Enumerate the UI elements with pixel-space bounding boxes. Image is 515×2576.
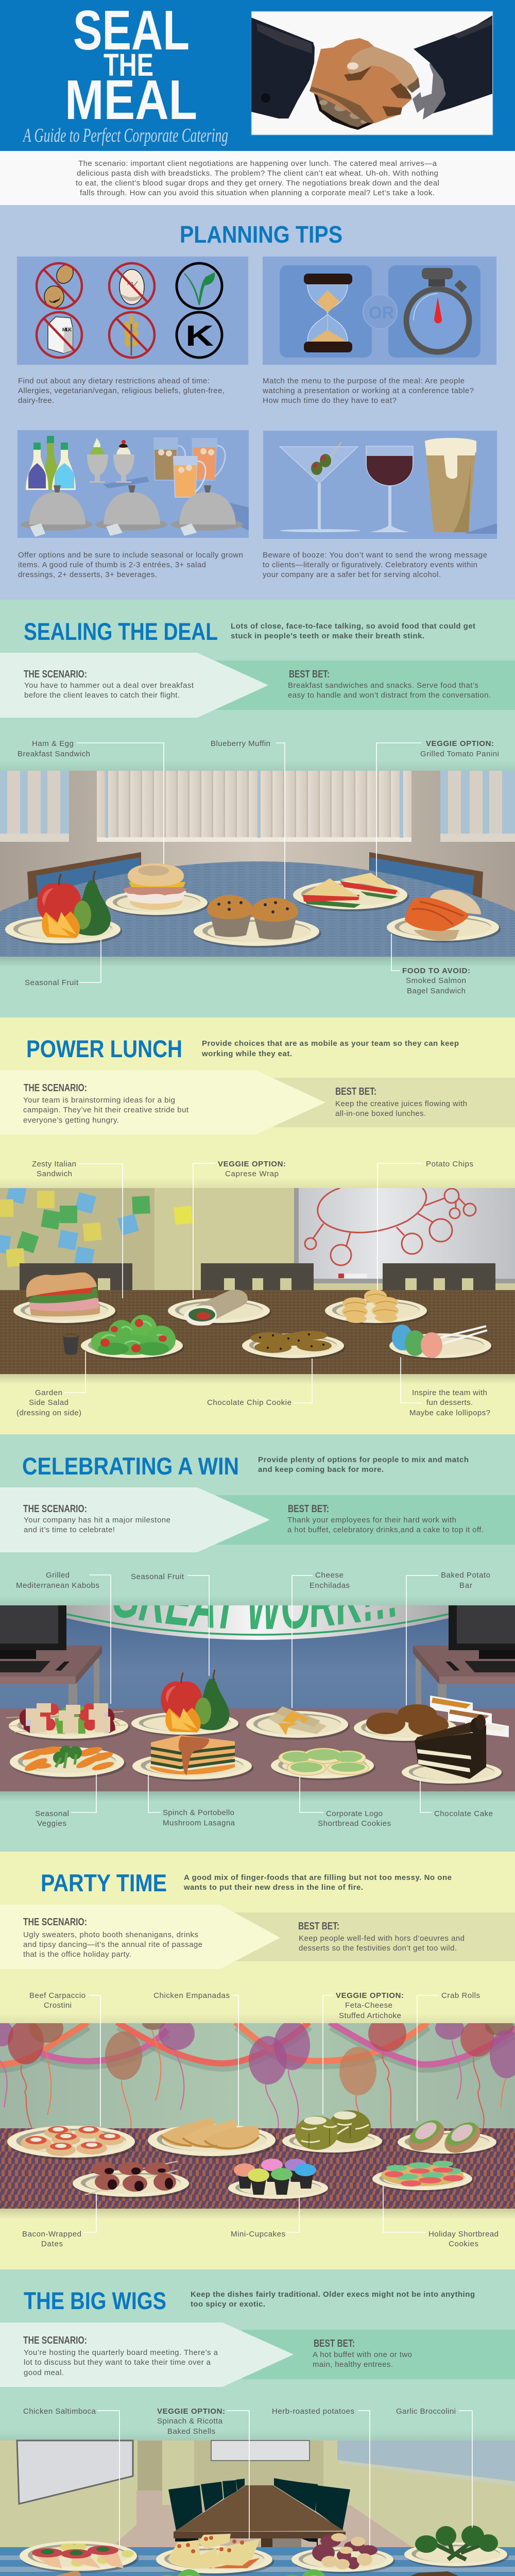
- label: food to avoid: Bagel Sandwich: [407, 987, 466, 995]
- label: seasonal veggies: Seasonal: [35, 1809, 69, 1818]
- food: herb roasted potatoes: [291, 2533, 395, 2573]
- intro paragraph: The scenario: important client negotiations are happening over lunch. The catered meal arrives—a: [78, 159, 437, 168]
- food: logo shortbread cookies: [271, 1748, 375, 1781]
- label: fun desserts: fun desserts.: [426, 1398, 473, 1407]
- label: shortbread cookies: Shortbread Cookies: [318, 1819, 391, 1828]
- section intro: Provide choices that are as mobile as your team so they can keep: [202, 1039, 459, 1048]
- title: SEAL: [73, 0, 190, 62]
- illustration: covered dishes: [21, 485, 243, 537]
- tip text: options: items. A good rule of thumb is 2-3 entrées, 3+ salad: [18, 561, 206, 569]
- label: grilled kabobs: [16, 1571, 111, 1704]
- scene: breakfast table: [0, 760, 515, 967]
- food: beef carpaccio crostini: [7, 2126, 137, 2160]
- panel: planning tips: [0, 205, 515, 600]
- scenario arrow: [0, 2323, 294, 2387]
- heading: planning tips: PLANNING TIPS: [180, 221, 342, 248]
- label: veggie option shells: Spinach & Ricotta: [157, 2417, 223, 2426]
- food: cake lollipops: [389, 1325, 493, 1360]
- label: food to avoid: FOOD TO AVOID:: [402, 967, 470, 975]
- icon: no peanuts: [37, 262, 82, 309]
- icon: no eggs: [109, 263, 154, 309]
- icon: no wheat: [109, 312, 154, 358]
- best bet band: [232, 1912, 515, 1961]
- food: stuffed artichoke: [282, 2110, 384, 2154]
- label: garden side salad: Garden: [35, 1388, 62, 1397]
- tip panel: food and drink options: [18, 430, 249, 538]
- label: lasagna: Spinch & Portobello: [163, 1808, 234, 1817]
- best bet band: [211, 660, 515, 710]
- heading: party time: PARTY TIME: [41, 1869, 167, 1896]
- scenario arrow: lot to discuss but they want to take their time over a: [24, 2358, 211, 2367]
- food: seasonal fruit: [5, 871, 122, 945]
- label: chicken saltimbocca: Chicken Saltimboca: [23, 2407, 96, 2416]
- label: potato chips: [377, 1160, 473, 1290]
- sticky notes: [0, 1183, 193, 1267]
- streamers: [0, 2022, 515, 2070]
- header banner: [0, 0, 515, 151]
- label: grilled kabobs: Mediterranean Kabobs: [16, 1581, 99, 1590]
- illustration: sundaes: [87, 438, 134, 483]
- label: veggie option artichoke: [323, 1991, 404, 2114]
- tip text: dietary: dairy-free.: [18, 396, 54, 405]
- label: holiday shortbread cookies: Cookies: [449, 2240, 478, 2248]
- label: garlic broccolini: [396, 2407, 472, 2528]
- label: bacon-wrapped dates: Dates: [41, 2240, 63, 2248]
- best bet band: [242, 2330, 515, 2379]
- label: fun desserts: Maybe cake lollipops?: [409, 1409, 490, 1417]
- best bet band: Keep the creative juices flowing with: [335, 1099, 467, 1108]
- label: zesty italian sandwich: [32, 1160, 123, 1298]
- scenario arrow: Ugly sweaters, photo booth shenanigans, drinks: [23, 1930, 198, 1939]
- label: ham and egg breakfast sandwich: Ham & Egg: [32, 739, 74, 748]
- label: shortbread cookies: Corporate Logo: [326, 1809, 383, 1818]
- banner: great work: [66, 1605, 449, 1640]
- best bet band: main, healthy entrees.: [313, 2360, 393, 2369]
- scene: office celebration: [0, 1601, 515, 1799]
- food: spinach lasagna: [132, 1735, 253, 1782]
- label: bacon-wrapped dates: Bacon-Wrapped: [22, 2230, 81, 2239]
- boardroom table and chairs: [168, 2478, 350, 2547]
- food: garden salad and dressing: [63, 1315, 184, 1360]
- tip text: options: Offer options and be sure to include seasonal or locally grown: [18, 551, 243, 560]
- tip panel: alcohol glasses: [263, 431, 497, 539]
- icon: or badge: [363, 295, 397, 329]
- section intro: [231, 622, 475, 640]
- label: veggie option artichoke: Feta-Cheese: [345, 2001, 392, 2010]
- icon: or badge: OR: [369, 303, 394, 322]
- food: seasonal veggies: [10, 1745, 126, 1779]
- label: cheese enchiladas: Cheese: [315, 1571, 344, 1580]
- food: mini cupcakes: [228, 2159, 330, 2200]
- scene: boardroom: [0, 2430, 515, 2576]
- label: chocolate cake: [420, 1781, 493, 1818]
- panel: sealing the deal: [0, 600, 515, 1018]
- icon: vegan symbol: [177, 263, 222, 309]
- label: baked potato bar: [406, 1571, 490, 1705]
- illustration: wine glass: [366, 446, 413, 532]
- label: beef carpaccio crostini: [29, 1991, 100, 2127]
- whiteboard: [294, 1188, 515, 1283]
- subtitle: A Guide to Perfect Corporate Catering: [22, 125, 228, 146]
- scenario arrow: THE SCENARIO:: [23, 1917, 87, 1928]
- scenario arrow: everyone’s getting hungry.: [23, 1116, 119, 1125]
- striped table runner: [0, 2547, 515, 2576]
- panel: the big wigs: [0, 2269, 515, 2576]
- best bet band: Breakfast sandwiches and snacks. Serve food that’s: [288, 681, 478, 690]
- label: beef carpaccio crostini: Beef Carpaccio: [29, 1991, 85, 2000]
- food: bacon-wrapped dates: [73, 2161, 191, 2199]
- section intro: A good mix of finger-foods that are filling but not too messy. No one: [184, 1873, 452, 1882]
- scenario arrow: and it’s time to celebrate!: [24, 1526, 115, 1534]
- label: herb roasted potatoes: [272, 2407, 370, 2546]
- icon: no dairy: [37, 312, 82, 358]
- tip text: dietary: [18, 377, 225, 405]
- label: baked potato bar: Baked Potato: [441, 1571, 490, 1580]
- handshake illustration: [251, 11, 493, 135]
- label: beef carpaccio crostini: Crostini: [44, 2001, 72, 2010]
- food: cheese enchiladas: [246, 1706, 350, 1740]
- section intro: [201, 1039, 459, 1058]
- intro paragraph: [0, 151, 515, 205]
- section intro: stuck in people’s teeth or make their breath stink.: [231, 632, 424, 640]
- label: seasonal fruit: [131, 1572, 209, 1676]
- label: chocolate chip cookie: Chocolate Chip Cookie: [207, 1398, 291, 1407]
- food: potato chips: [325, 1290, 428, 1325]
- scenario arrow: that is the office holiday party.: [23, 1950, 131, 1959]
- food: caesar salad: [130, 2569, 233, 2576]
- panel: celebrating a win: [0, 1434, 515, 1852]
- label: lasagna: Mushroom Lasagna: [163, 1819, 235, 1827]
- food: baked potato bar: [354, 1696, 509, 1742]
- label: veggie option panini: [376, 739, 499, 876]
- label: veggie option shells: Baked Shells: [167, 2427, 215, 2436]
- label: seasonal veggies: [35, 1774, 96, 1828]
- label: veggie option wrap: Caprese Wrap: [225, 1170, 279, 1178]
- section intro: [183, 1873, 452, 1892]
- icon: kosher symbol: [177, 312, 222, 358]
- label: veggie option panini: VEGGIE OPTION:: [426, 739, 494, 748]
- scenario arrow: Your team is brainstorming ideas for a big: [23, 1096, 175, 1105]
- label: holiday shortbread cookies: [383, 2185, 499, 2248]
- food: caprese wrap: [168, 1290, 271, 1326]
- left computer desk: [0, 1605, 102, 1708]
- label: veggie option shells: [157, 2407, 249, 2539]
- window: [337, 2441, 515, 2481]
- food: smoked salmon bagel: [387, 890, 501, 943]
- label: veggie option wrap: VEGGIE OPTION:: [218, 1160, 286, 1168]
- panel: party time: [0, 1852, 515, 2269]
- heading: power lunch: POWER LUNCH: [26, 1035, 182, 1062]
- label: potato chips: Potato Chips: [426, 1160, 473, 1168]
- food: crab rolls: [398, 2115, 498, 2159]
- food: chocolate cake: [402, 1715, 503, 1785]
- scenario arrow: THE SCENARIO:: [24, 1082, 87, 1094]
- scenario arrow: [0, 1070, 325, 1134]
- label: chicken saltimbocca: [23, 2407, 119, 2546]
- food: baked shells: [156, 2534, 274, 2575]
- label: ham and egg breakfast sandwich: Breakfast Sandwich: [18, 750, 90, 758]
- label: fun desserts: [401, 1357, 490, 1417]
- best bet band: BEST BET:: [298, 1921, 339, 1932]
- tip text: booze: your company are a safer bet for serving alcohol.: [263, 570, 441, 579]
- label: seasonal fruit: Seasonal Fruit: [131, 1572, 184, 1581]
- best bet band: all-in-one boxed lunches.: [335, 1109, 426, 1118]
- tip text: booze: [263, 551, 487, 579]
- tip text: dietary: Allergies, vegetarian/vegan, religious beliefs, gluten-free,: [18, 386, 225, 395]
- tip text: booze: Beware of booze: You don’t want to send the wrong message: [263, 551, 487, 560]
- label: chocolate chip cookie: [207, 1359, 312, 1407]
- best bet band: Keep people well-fed with hors d’oeuvres and: [299, 1934, 465, 1943]
- food: italian sandwich: [13, 1273, 117, 1325]
- label: blueberry muffin: Blueberry Muffin: [211, 739, 270, 748]
- label: crab rolls: [417, 1991, 480, 2121]
- tip text: purpose: Match the menu to the purpose of the meal: Are people: [263, 377, 465, 385]
- best bet band: desserts so the festivities don’t get too wild.: [299, 1944, 457, 1953]
- label: chocolate cake: Chocolate Cake: [434, 1809, 493, 1818]
- label: chicken empanadas: Chicken Empanadas: [153, 1991, 230, 2000]
- illustration: beer pint: [425, 438, 476, 532]
- chairs: [20, 1263, 495, 1290]
- section intro: and keep coming back for more.: [258, 1465, 384, 1474]
- food: chocolate chip cookies: [242, 1331, 346, 1360]
- scene: party room: [0, 2013, 515, 2219]
- label: mini cupcakes: Mini-Cupcakes: [231, 2230, 285, 2239]
- title: [65, 0, 197, 131]
- best bet band: easy to handle and won’t distract from the conversation.: [288, 691, 491, 700]
- label: herb roasted potatoes: Herb-roasted potatoes: [272, 2407, 354, 2416]
- best bet band: [216, 1495, 515, 1545]
- label: grilled kabobs: Grilled: [46, 1571, 70, 1580]
- label: garden side salad: (dressing on side): [16, 1409, 81, 1417]
- label: zesty italian sandwich: Zesty Italian: [32, 1160, 76, 1168]
- intro paragraph: delicious pasta dish with breadsticks. The problem? The client can’t eat wheat. Uh-oh. With nothing: [77, 169, 438, 178]
- best bet band: [273, 1078, 515, 1127]
- heading: celebrating a win: CELEBRATING A WIN: [22, 1452, 239, 1480]
- icon: hourglass: [304, 274, 352, 352]
- illustration: martini: [280, 442, 360, 532]
- section intro: Keep the dishes fairly traditional. Older execs might not be into anything: [191, 2290, 475, 2299]
- food: grilled tomato panini: [293, 873, 409, 911]
- food: holiday shortbread: [372, 2161, 474, 2192]
- panel: power lunch: [0, 1018, 515, 1434]
- best bet band: BEST BET:: [288, 1503, 329, 1515]
- label: crab rolls: Crab Rolls: [441, 1991, 480, 2000]
- label: ham and egg breakfast sandwich: [18, 739, 164, 864]
- best bet band: A hot buffet with one or two: [313, 2350, 412, 2359]
- section intro: wants to put their new dress in the line of fire.: [183, 1883, 363, 1892]
- label: zesty italian sandwich: Sandwich: [37, 1170, 72, 1178]
- heading: sealing the deal: SEALING THE DEAL: [24, 618, 218, 645]
- tip panel: dietary restriction icons: [17, 257, 248, 365]
- best bet band: BEST BET:: [335, 1086, 376, 1097]
- food: chicken saltimbocca: [20, 2541, 139, 2573]
- label: garden side salad: Side Salad: [29, 1398, 68, 1407]
- label: seasonal veggies: Veggies: [37, 1819, 66, 1828]
- food: garlic broccolini: [404, 2526, 509, 2568]
- section intro: [258, 1455, 469, 1474]
- best bet band: BEST BET:: [314, 2338, 355, 2349]
- food: tiramisu: [381, 2571, 484, 2576]
- title: THE: [104, 47, 153, 82]
- floor: [112, 2490, 412, 2547]
- whiteboard left: [17, 2441, 133, 2504]
- label: bacon-wrapped dates: [22, 2194, 96, 2248]
- section intro: working while they eat.: [201, 1049, 292, 1058]
- label: cheese enchiladas: Enchiladas: [310, 1581, 350, 1590]
- tip text: purpose: How much time do they have to eat?: [263, 396, 397, 405]
- scenario arrow: THE SCENARIO:: [24, 669, 87, 680]
- tip text: dietary: Find out about any dietary restrictions ahead of time:: [18, 377, 210, 385]
- label: shortbread cookies: [300, 1776, 391, 1828]
- label: seasonal fruit: Seasonal Fruit: [25, 978, 79, 987]
- label: holiday shortbread cookies: Holiday Shortbread: [428, 2230, 499, 2239]
- food: seasonal fruit: [131, 1670, 240, 1736]
- section intro: Provide plenty of options for people to mix and match: [258, 1455, 469, 1464]
- food: kabobs: [6, 1703, 130, 1740]
- tip text: booze: to clients—literally or figuratively. Celebratory events within: [263, 561, 477, 569]
- food: breadsticks: [10, 2569, 114, 2576]
- title: MEAL: [65, 69, 197, 131]
- scenario arrow: good meal.: [24, 2368, 64, 2377]
- label: veggie option artichoke: Stuffed Artichoke: [339, 2011, 401, 2020]
- projection screen: [211, 2441, 310, 2461]
- scenario arrow: campaign. They’ve hit their creative stride but: [23, 1106, 189, 1114]
- label: veggie option panini: Grilled Tomato Panini: [420, 750, 499, 758]
- food: blueberry muffins: [194, 895, 321, 948]
- tip text: options: dressings, 2+ desserts, 3+ beverages.: [18, 570, 157, 579]
- right computer desk: [413, 1605, 515, 1708]
- tip panel: hourglass or stopwatch: [263, 257, 496, 365]
- label: cheese enchiladas: [292, 1571, 350, 1708]
- icon: stopwatch: [406, 268, 469, 352]
- label: blueberry muffin: [211, 739, 285, 899]
- scene: brainstorm room: [0, 1178, 515, 1384]
- illustration: pitchers: [153, 437, 225, 498]
- label: food to avoid: [391, 934, 470, 995]
- label: chicken empanadas: [153, 1991, 238, 2125]
- best bet band: BEST BET:: [289, 669, 330, 680]
- heading: the big wigs: THE BIG WIGS: [24, 2287, 166, 2314]
- best bet band: a hot buffet, celebratory drinks,and a cake to top it off.: [287, 1526, 484, 1534]
- food: chicken empanadas: [148, 2117, 278, 2158]
- label: garden side salad: [16, 1351, 85, 1417]
- label: garlic broccolini: Garlic Broccolini: [396, 2407, 456, 2416]
- food: garden salad: [250, 2569, 354, 2576]
- label: lasagna: [148, 1775, 235, 1827]
- tip text: purpose: watching a presentation or working at a conference table?: [262, 386, 474, 395]
- tip text: options: [18, 551, 243, 579]
- best bet band: Thank your employees for their hard work with: [287, 1516, 456, 1524]
- scenario arrow: [0, 1487, 270, 1552]
- scenario arrow: You have to hammer out a deal over breakfast: [24, 681, 194, 690]
- food: ham and egg sandwich: [106, 863, 209, 917]
- label: fun desserts: Inspire the team with: [412, 1388, 487, 1397]
- icon: kosher symbol: K: [185, 319, 214, 352]
- tip text: purpose: [262, 377, 474, 405]
- scenario arrow: Your company has hit a major milestone: [24, 1516, 170, 1524]
- illustration: dressing bottles: [26, 436, 76, 490]
- label: veggie option wrap: [193, 1160, 286, 1298]
- scenario arrow: [0, 653, 268, 718]
- intro paragraph: falls through. How can you avoid this situation when planning a corporate meal? Let’s take a look.: [80, 189, 435, 197]
- balloons: [0, 2023, 515, 2095]
- label: food to avoid: Smoked Salmon: [406, 976, 466, 985]
- scenario arrow: and tipsy dancing—it’s the annual rite of passage: [23, 1940, 202, 1949]
- scenario arrow: [0, 1905, 280, 1969]
- scenario arrow: before the client leaves to catch their flight.: [24, 691, 180, 700]
- balloon strings: [0, 2030, 506, 2128]
- label: veggie option shells: VEGGIE OPTION:: [157, 2407, 225, 2416]
- icon: no dairy: MILK: [62, 327, 72, 332]
- label: mini cupcakes: [231, 2198, 299, 2239]
- scenario arrow: You’re hosting the quarterly board meeting. There’s a: [24, 2348, 218, 2357]
- banner: great work: GREAT WORK!!!: [113, 1605, 396, 1629]
- section intro: Lots of close, face-to-face talking, so avoid food that could get: [231, 622, 475, 631]
- section intro: too spicy or exotic.: [191, 2300, 265, 2309]
- scenario arrow: THE SCENARIO:: [23, 2335, 87, 2346]
- label: seasonal fruit: [25, 939, 101, 987]
- scenario arrow: THE SCENARIO:: [23, 1503, 87, 1515]
- label: veggie option artichoke: VEGGIE OPTION:: [336, 1991, 404, 2000]
- intro paragraph: to eat, the client’s blood sugar drops and they get ornery. The negotiations break down and the deal: [76, 179, 439, 188]
- label: baked potato bar: Bar: [459, 1581, 472, 1590]
- section intro: [191, 2290, 475, 2309]
